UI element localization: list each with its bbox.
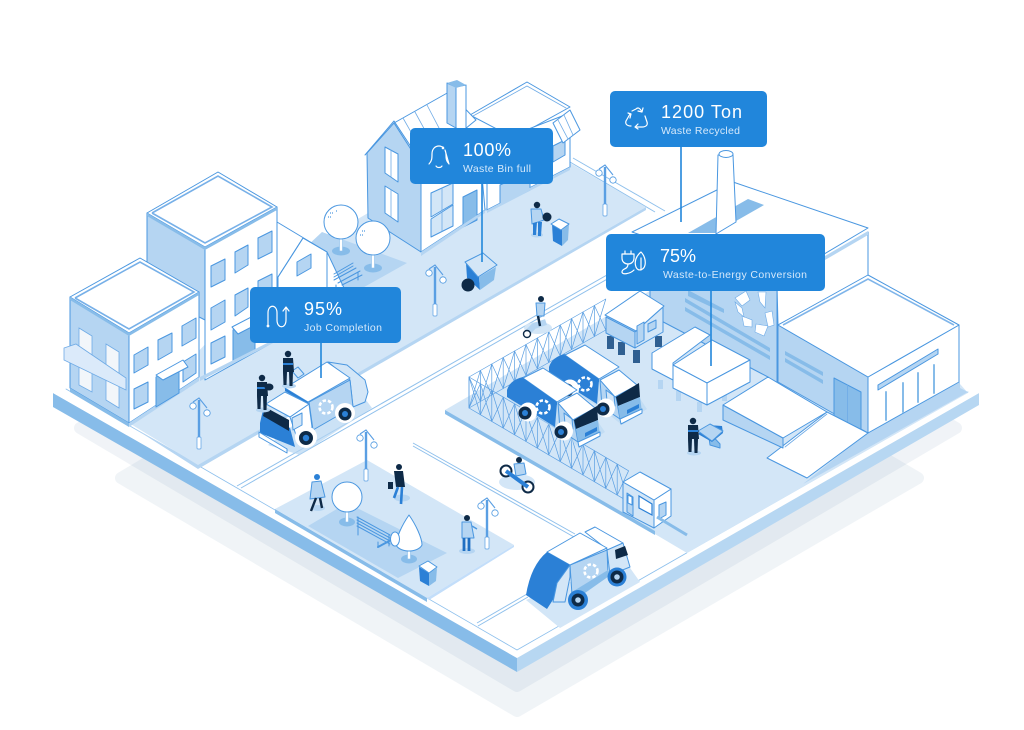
truck: rear in yard xyxy=(549,345,647,425)
factory yard xyxy=(445,280,975,556)
icon: recycle xyxy=(626,108,647,129)
trees and bench on street xyxy=(324,205,390,291)
scooter rider xyxy=(524,296,552,338)
front fence xyxy=(469,377,629,502)
guard booth xyxy=(623,472,687,535)
callout: 75% waste-to-energy: 75% xyxy=(660,246,696,266)
chimney xyxy=(688,150,764,234)
recycling mark on wall xyxy=(735,291,774,336)
dumpster with callout xyxy=(462,253,497,292)
wheelie bin: near woman xyxy=(551,219,569,246)
small house xyxy=(277,222,345,300)
chimney xyxy=(447,80,466,133)
callout: 75% waste-to-energy: Waste-to-Energy Conversion xyxy=(663,269,807,281)
callout: 95% job completion: Job Completion xyxy=(304,322,382,334)
workers at truck xyxy=(256,351,304,412)
platform slab xyxy=(53,128,979,672)
truck: at street with workers xyxy=(259,362,372,455)
litter bin xyxy=(390,532,400,546)
park wheelie bin xyxy=(419,561,437,586)
back fence xyxy=(469,299,606,408)
loading ramps xyxy=(723,377,868,478)
callout: 95% job completion xyxy=(250,287,401,343)
park trees xyxy=(332,482,422,564)
woman with trash bag xyxy=(531,202,552,238)
street block: buildings side xyxy=(129,163,646,469)
callout: 1200 ton waste recycled: Waste Recycled xyxy=(661,125,740,137)
park xyxy=(275,460,514,602)
pedestrian: woman with bag xyxy=(388,464,410,504)
worker with dumpster xyxy=(687,418,723,456)
pedestrian: woman standing xyxy=(459,515,477,554)
callout: 1200 ton waste recycled: 1200 Ton xyxy=(661,102,742,122)
factory right wing xyxy=(778,275,959,433)
callout stem: energy xyxy=(710,291,712,366)
park bench xyxy=(357,517,393,547)
callout: 100% waste bin full: Waste Bin full xyxy=(463,163,531,175)
callout: 100% waste bin full xyxy=(410,128,553,184)
factory main building xyxy=(632,182,868,385)
truck: front in yard xyxy=(507,368,605,448)
motorcycle rider xyxy=(499,457,535,492)
icon: plug and leaf xyxy=(622,251,645,274)
truck: bottom road xyxy=(526,527,640,628)
callout: 1200 ton waste recycled xyxy=(610,91,767,147)
pedestrian: walking left xyxy=(310,474,325,511)
front building xyxy=(64,258,199,427)
bench xyxy=(334,263,362,291)
storage shed xyxy=(605,291,664,363)
storage boxes xyxy=(652,327,750,412)
callout: 100% waste bin full: 100% xyxy=(463,140,511,160)
callout stem: waste bin xyxy=(481,184,483,262)
street lamps xyxy=(190,165,616,549)
callout stem: job completion xyxy=(320,343,322,378)
shop building xyxy=(470,82,580,213)
callout: 95% job completion: 95% xyxy=(304,299,342,319)
callout: 75% waste-to-energy xyxy=(606,234,825,291)
road markings xyxy=(237,158,665,626)
ground shadow xyxy=(80,170,956,711)
tall building xyxy=(147,172,277,381)
windows left wall xyxy=(64,328,126,408)
house xyxy=(365,80,485,256)
icon: route arrow xyxy=(267,306,289,327)
tree patch xyxy=(290,232,407,295)
callout stem: waste recycled xyxy=(680,147,682,222)
icon: bell xyxy=(429,146,449,168)
